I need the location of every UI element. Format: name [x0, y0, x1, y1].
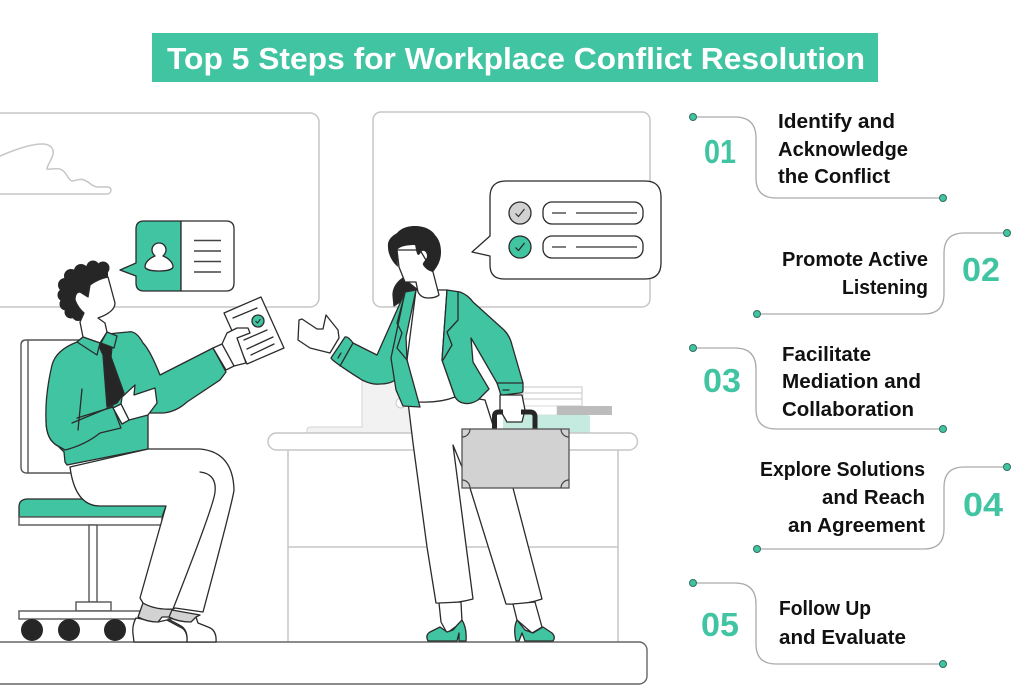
man: front hand	[121, 385, 157, 420]
speech bubble: profile card	[120, 221, 234, 291]
woman: ponytail	[393, 278, 418, 306]
man: front arm	[46, 407, 121, 450]
step 1: Acknowledge	[778, 139, 908, 161]
icon: green check	[509, 236, 531, 258]
step 3: Mediation and	[782, 371, 921, 393]
title banner	[152, 33, 878, 82]
step 4	[754, 459, 1010, 552]
woman: left sleeve and hand	[298, 292, 405, 384]
step 4: 04	[963, 486, 1004, 523]
step 2: 02	[962, 251, 1000, 288]
step 4: an Agreement	[788, 515, 925, 537]
woman: jacket left panel	[391, 290, 420, 407]
man: raised hand and cuff	[213, 328, 250, 370]
man: trousers	[70, 449, 234, 612]
step 2	[754, 230, 1010, 318]
step 3: 03	[703, 362, 741, 399]
woman: lower hand	[500, 395, 525, 422]
woman: white top	[407, 290, 455, 402]
desk with monitor and books	[268, 380, 638, 642]
step 5	[690, 580, 946, 668]
woman: face and neck	[397, 250, 439, 298]
step 2: Promote Active	[782, 249, 928, 271]
step 3: Facilitate	[782, 344, 871, 366]
step 2: Listening	[842, 277, 928, 299]
icon: person	[145, 243, 173, 271]
man seated	[46, 260, 284, 642]
woman standing	[298, 226, 554, 641]
man: collar and tie	[77, 332, 124, 407]
step 1	[690, 111, 946, 202]
speech bubble: checklist	[472, 181, 661, 279]
man: curly hair	[58, 260, 110, 321]
step 4: and Reach	[822, 487, 925, 509]
step 5: 05	[701, 606, 739, 643]
step 5: Follow Up	[779, 598, 871, 620]
man: document in hand	[224, 297, 284, 364]
woman: trousers	[408, 395, 542, 604]
office chair	[19, 340, 166, 641]
step 5: and Evaluate	[779, 627, 906, 649]
woman: ankles and shoes	[427, 602, 554, 641]
man: green shirt	[46, 332, 226, 465]
step 3: Collaboration	[782, 399, 914, 421]
step 1: Identify and	[778, 111, 895, 133]
panel: left window with cloud	[0, 113, 319, 307]
icon: grey check	[509, 202, 531, 224]
step 1: 01	[704, 133, 736, 170]
title banner: Top 5 Steps for Workplace Conflict Resolution	[167, 41, 865, 76]
floor	[0, 642, 647, 684]
step 3	[690, 344, 946, 432]
woman: hair	[388, 226, 441, 272]
step 4: Explore Solutions	[760, 459, 925, 481]
briefcase	[462, 412, 569, 488]
man: shoes and socks	[133, 603, 216, 642]
man: face and neck	[75, 277, 115, 343]
panel: centre window	[373, 112, 650, 307]
step 1: the Conflict	[778, 166, 890, 188]
woman: jacket right panel	[442, 290, 523, 404]
